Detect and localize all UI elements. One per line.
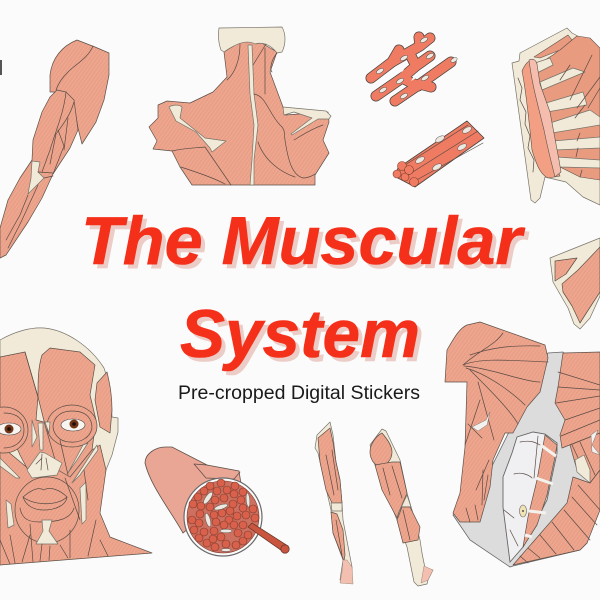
fascicles — [188, 479, 259, 552]
sticker edge: cropped item at left margin — [0, 60, 2, 75]
title shadow: The Muscular: The Muscular — [85, 207, 530, 283]
title line: The Muscular: The Muscular — [81, 203, 526, 279]
sticker: branching cardiac muscle fibres — [371, 36, 458, 101]
sticker: muscle cross-section cylinder — [145, 447, 289, 556]
title — [81, 203, 530, 376]
subtitle: Pre-cropped Digital Stickers — [178, 383, 420, 404]
sticker: facial muscles — [0, 328, 152, 565]
title line: System: System — [180, 296, 420, 372]
sticker: arm muscles — [0, 40, 109, 258]
sticker: skeletal muscle fibre bundle — [393, 121, 484, 187]
sticker: torso muscles — [445, 322, 600, 567]
sticker: rib cage with intercostal muscles — [512, 28, 600, 205]
sticker: scapula — [550, 238, 600, 329]
title shadow: System: System — [184, 300, 424, 376]
sticker: neck and back muscles — [149, 27, 331, 185]
sticker: leg side view — [370, 429, 433, 586]
sticker: leg front view — [315, 422, 353, 584]
